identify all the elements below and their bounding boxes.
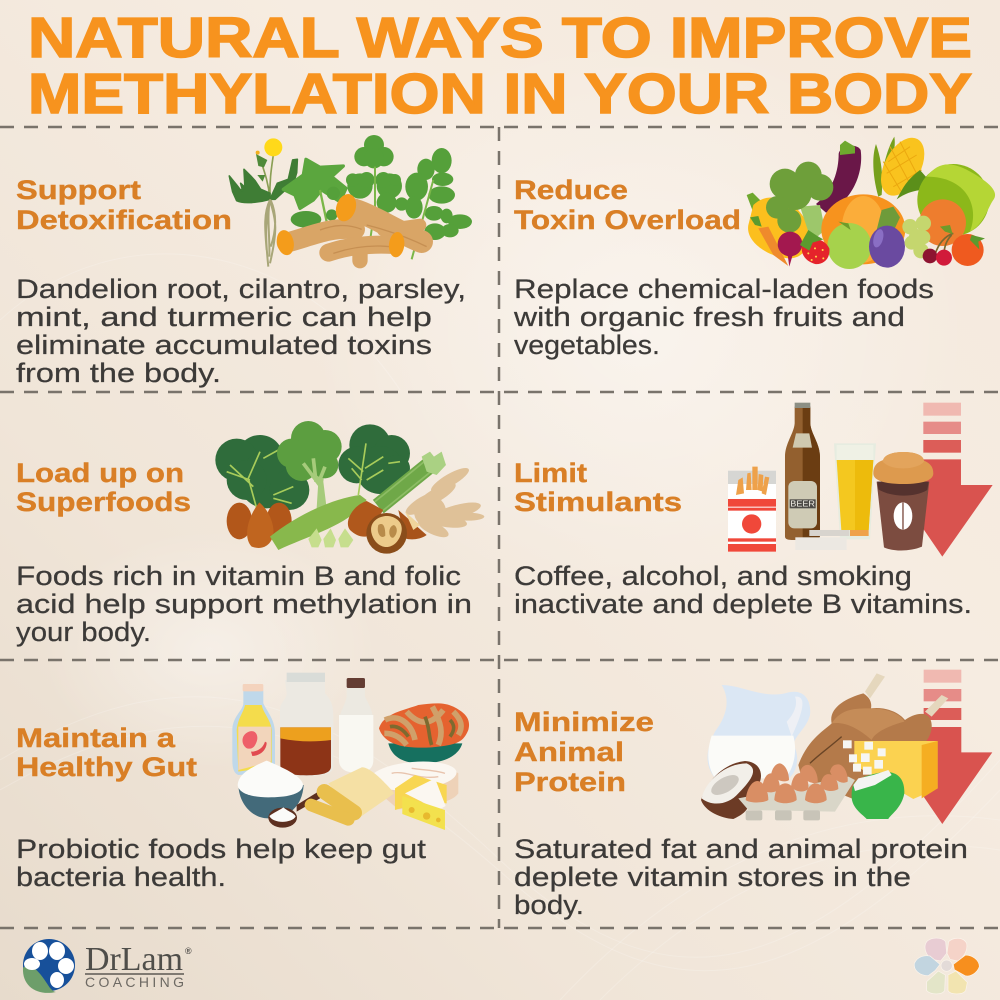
text: maintain a healthy gut: bacteria health. <box>16 862 226 892</box>
icon: herbs and turmeric root <box>229 135 472 267</box>
icon: fruits and vegetables <box>747 131 995 269</box>
icon: probiotic foods <box>232 673 469 830</box>
panel: load up on superfoods <box>16 421 484 647</box>
text: load up on superfoods: acid help support methylation in <box>16 589 472 619</box>
text: support detoxification <box>16 274 466 388</box>
heading: reduce toxin overload <box>514 175 741 235</box>
logo: DrLam Coaching <box>23 939 192 993</box>
heading: load up on superfoods: Load up on <box>16 458 184 488</box>
heading: minimize animal protein: Minimize <box>514 707 654 737</box>
heading: support detoxification: Support <box>16 175 141 205</box>
heading: minimize animal protein: Animal <box>514 737 624 767</box>
wordmark: COACHING <box>85 974 184 990</box>
text: reduce toxin overload: with organic fresh fruits and <box>513 302 905 332</box>
panel: maintain a healthy gut <box>16 673 469 892</box>
text: minimize animal protein: body. <box>514 890 584 920</box>
title <box>28 6 972 126</box>
panel: minimize animal protein <box>514 670 992 920</box>
panel: support detoxification <box>16 135 472 388</box>
heading: limit stimulants: Stimulants <box>514 487 682 517</box>
heading: load up on superfoods <box>16 458 191 517</box>
icon: cigarettes, beer and coffee <box>728 403 993 557</box>
text: minimize animal protein <box>514 834 968 920</box>
title: METHYLATION IN YOUR BODY <box>28 62 972 126</box>
icon: down arrow <box>893 670 992 824</box>
text: minimize animal protein: Saturated fat and animal protein <box>514 834 968 864</box>
text: load up on superfoods <box>16 561 472 647</box>
text: limit stimulants: Coffee, alcohol, and smoking <box>514 561 912 591</box>
heading: minimize animal protein <box>514 707 654 797</box>
wordmark <box>85 941 192 990</box>
text: limit stimulants: inactivate and deplete B vitamins. <box>514 589 972 619</box>
heading: support detoxification <box>16 175 232 235</box>
text: load up on superfoods: your body. <box>16 617 151 647</box>
heading: limit stimulants: Limit <box>514 458 587 488</box>
panel: limit stimulants <box>514 403 993 619</box>
panel: reduce toxin overload <box>513 131 995 360</box>
icon: pastel flower <box>914 938 979 994</box>
text: reduce toxin overload: vegetables. <box>514 330 660 360</box>
icon: blue flower globe <box>23 939 75 993</box>
icon: cigarettes, beer and coffee: BEER <box>790 500 815 509</box>
text: reduce toxin overload <box>513 274 934 360</box>
heading: limit stimulants <box>514 458 682 517</box>
wordmark: ® <box>185 946 192 956</box>
heading: maintain a healthy gut: Maintain a <box>16 723 176 753</box>
icon: down arrow <box>893 403 993 557</box>
text: support detoxification: Dandelion root, cilantro, parsley, <box>16 274 466 304</box>
text: support detoxification: from the body. <box>16 358 221 388</box>
icon: animal protein foods <box>701 670 992 824</box>
heading: reduce toxin overload: Reduce <box>514 175 628 205</box>
text: maintain a healthy gut <box>16 834 427 892</box>
heading: maintain a healthy gut: Healthy Gut <box>16 752 197 782</box>
heading: maintain a healthy gut <box>16 723 197 782</box>
heading: support detoxification: Detoxification <box>16 205 232 235</box>
text: support detoxification: eliminate accumulated toxins <box>16 330 432 360</box>
text: limit stimulants <box>514 561 972 619</box>
text: reduce toxin overload: Replace chemical-laden foods <box>514 274 934 304</box>
icon: greens, nuts and grains <box>215 421 484 554</box>
heading: minimize animal protein: Protein <box>514 767 626 797</box>
text: support detoxification: mint, and turmeric can help <box>16 302 432 332</box>
title: NATURAL WAYS TO IMPROVE <box>28 6 972 70</box>
wordmark: DrLam <box>85 941 183 978</box>
text: load up on superfoods: Foods rich in vitamin B and folic <box>16 561 461 591</box>
text: maintain a healthy gut: Probiotic foods help keep gut <box>16 834 427 864</box>
text: minimize animal protein: deplete vitamin stores in the <box>514 862 911 892</box>
heading: reduce toxin overload: Toxin Overload <box>514 205 741 235</box>
heading: load up on superfoods: Superfoods <box>16 487 191 517</box>
